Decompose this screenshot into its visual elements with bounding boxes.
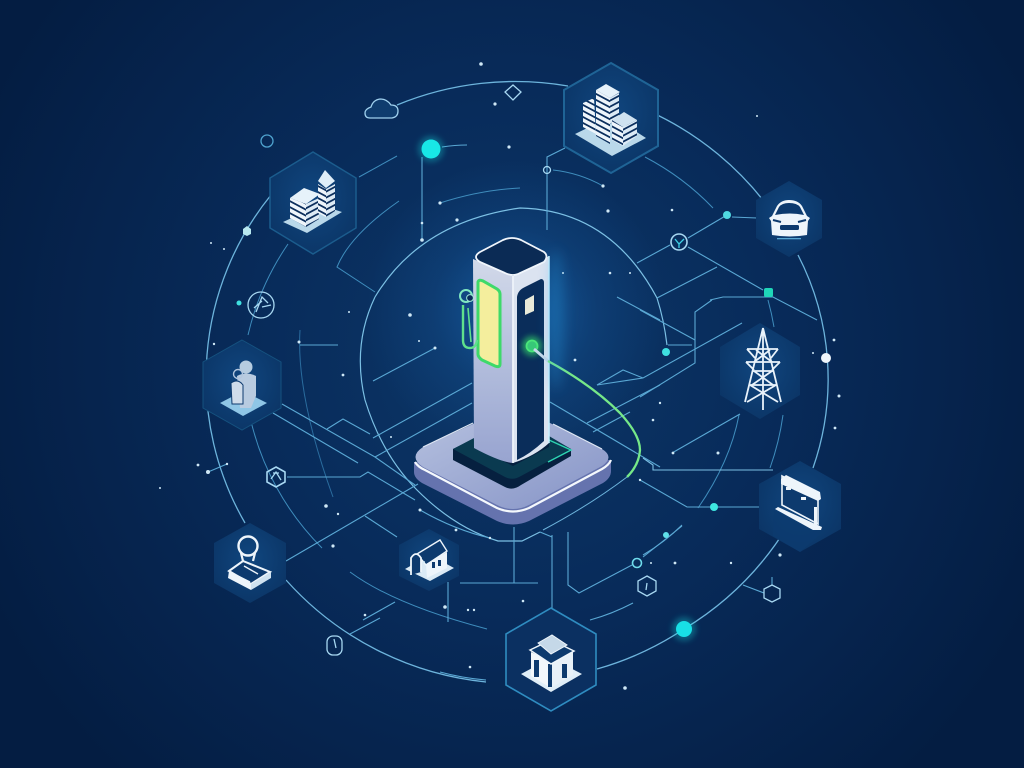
hexagon: house: [399, 529, 459, 591]
cloud icon: [365, 99, 398, 118]
right face: [513, 256, 549, 463]
screen: [525, 295, 534, 315]
hexagon: battery box: [759, 461, 841, 552]
circuit lines: [208, 145, 817, 680]
hexagon: civic building: [506, 608, 596, 711]
left face: [473, 259, 513, 463]
hexagon: transmission tower: [720, 323, 800, 419]
hexagon: car: [756, 181, 822, 257]
hexagon: top buildings: [564, 63, 658, 173]
holster and connector: [460, 290, 477, 348]
hexagon: left buildings: [270, 152, 356, 254]
display panel glow: [478, 282, 500, 366]
cable: [534, 349, 548, 361]
outer ring: [206, 82, 828, 682]
glowing nodes: [236, 136, 831, 641]
hexagon: person on block: [214, 523, 286, 603]
inner ring: [360, 208, 667, 541]
charger side glow: [548, 250, 564, 390]
pedestal: [453, 420, 571, 489]
scattered particles: [159, 62, 840, 690]
charging station: [414, 238, 640, 530]
charging port glow: [522, 336, 542, 356]
hexagon: people: [203, 340, 281, 430]
centre glow: [365, 160, 665, 460]
base plate: [414, 460, 611, 524]
top cap: [476, 238, 546, 275]
small node icons: [248, 85, 780, 655]
display panel: [478, 280, 500, 367]
middle ring: [248, 156, 783, 629]
